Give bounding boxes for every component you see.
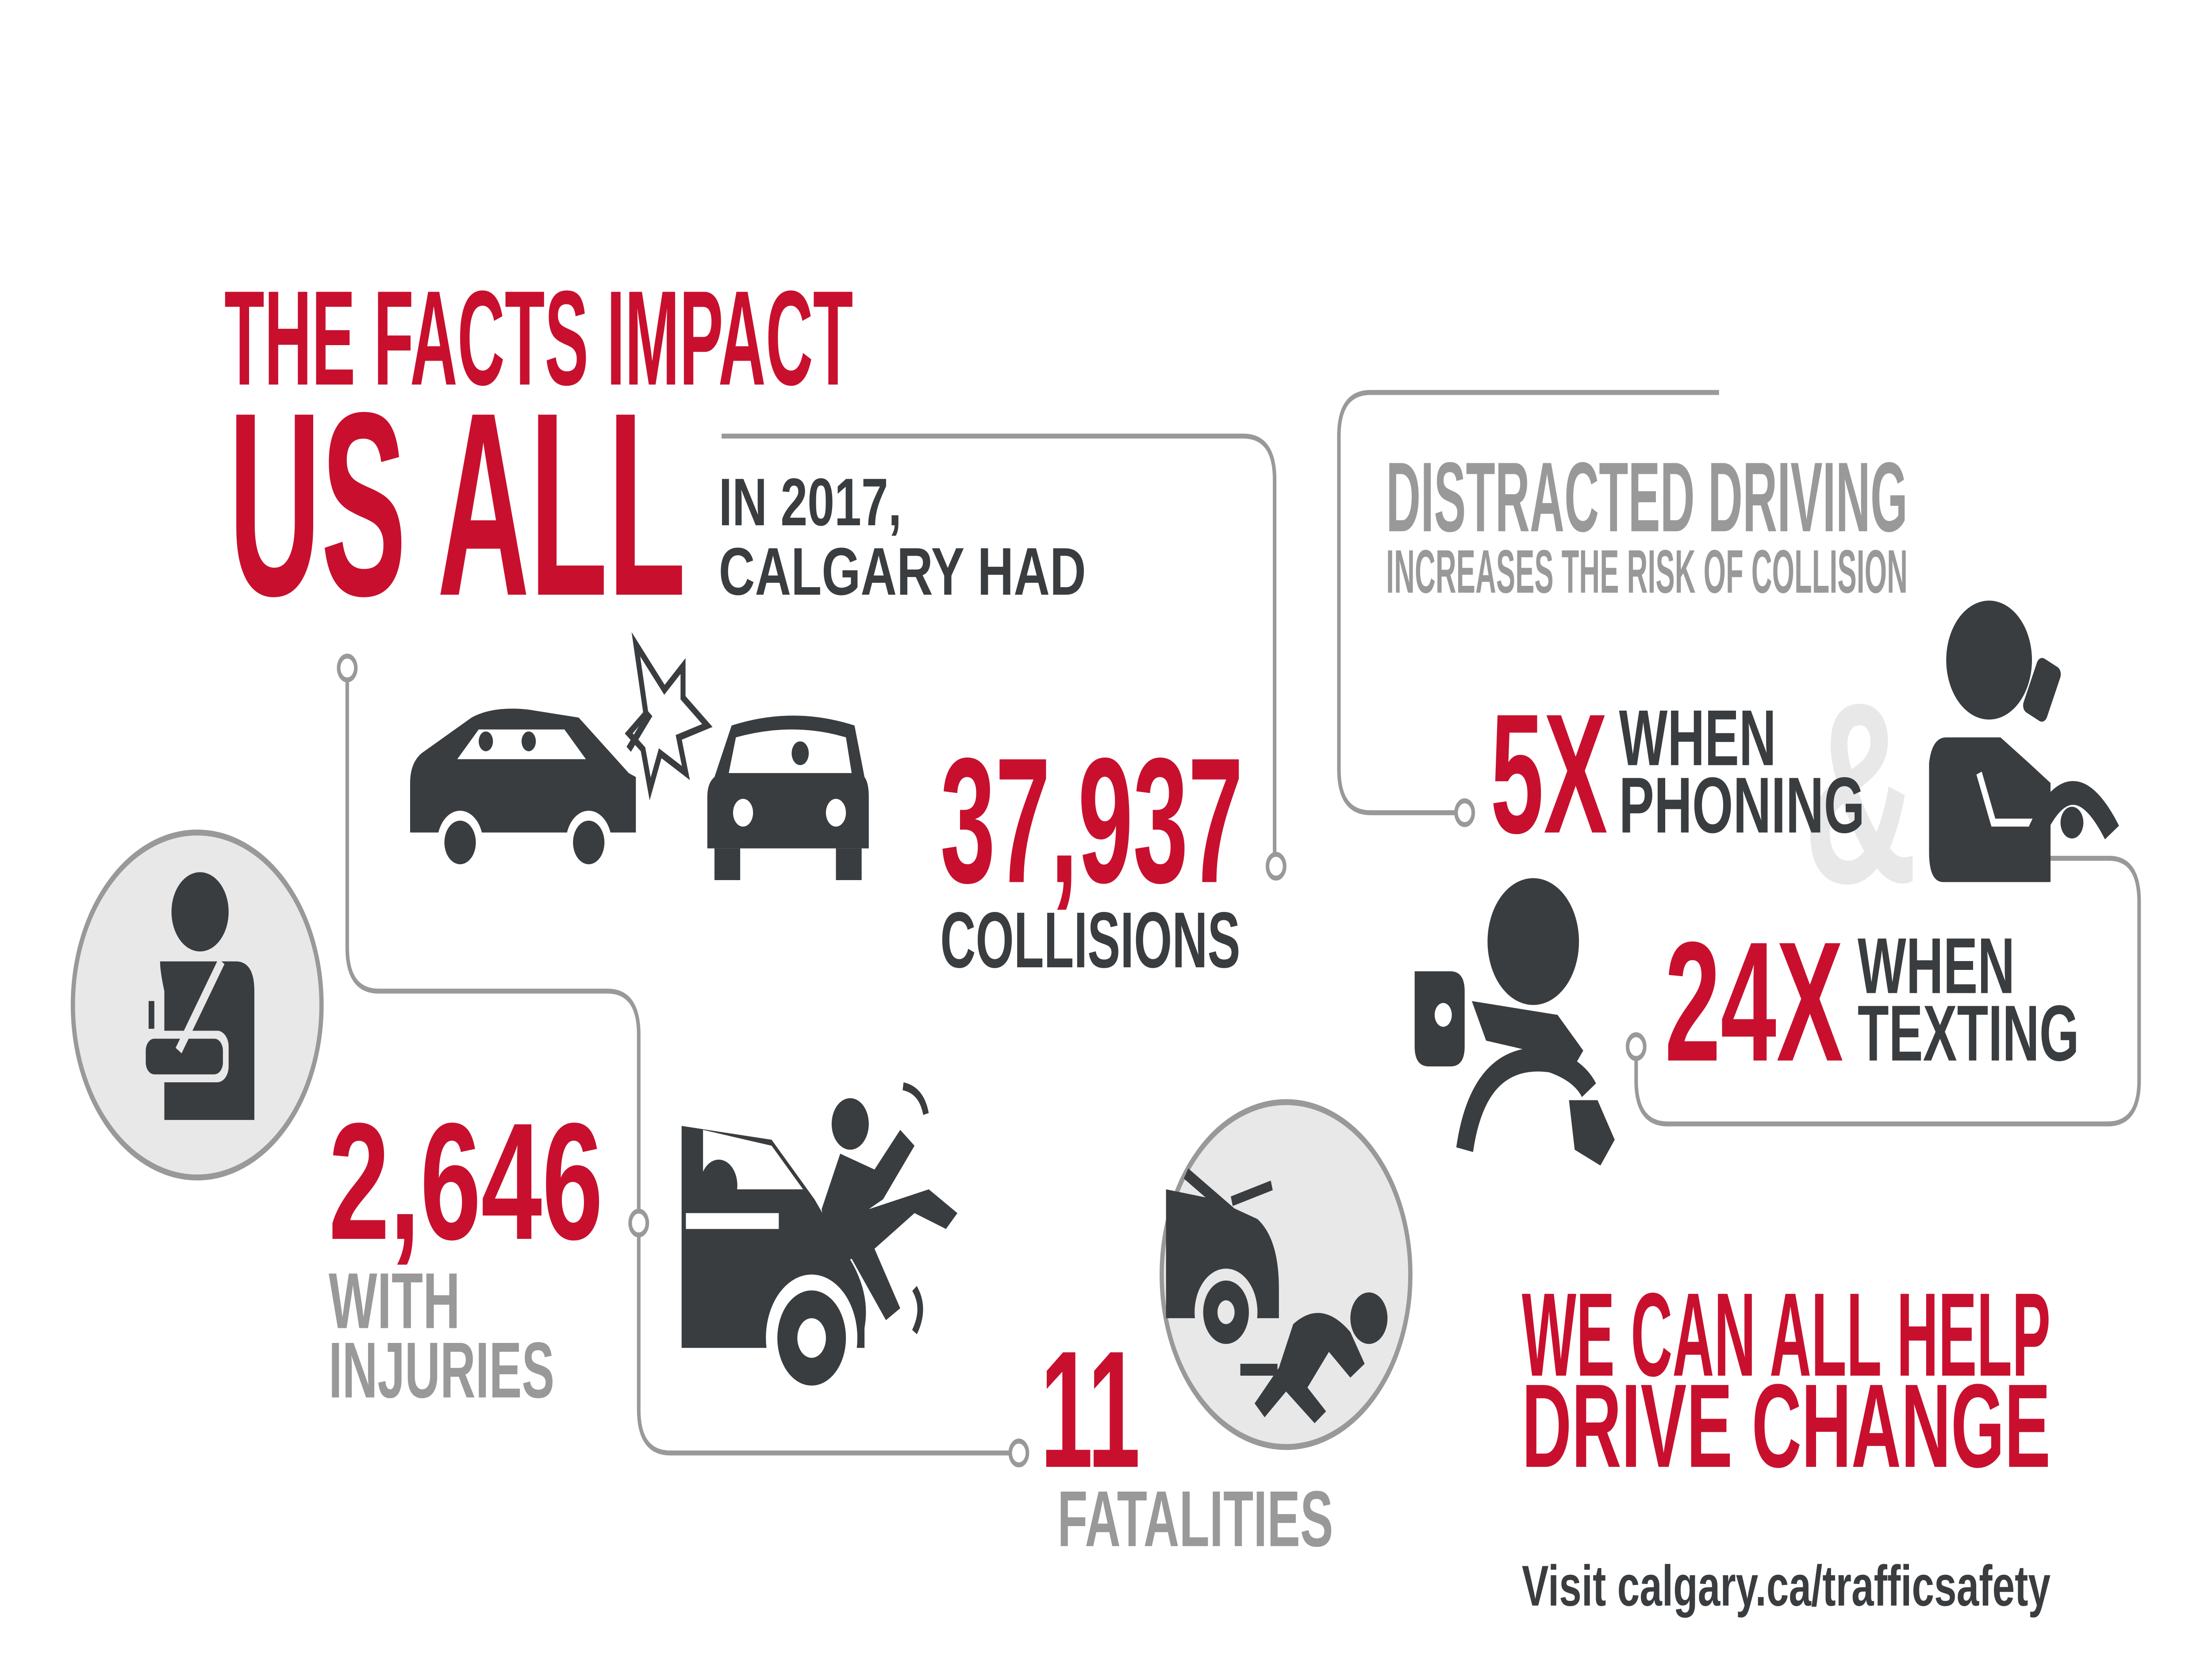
stat: phoning: PHONING [1619,762,1865,850]
stat: injuries [329,1088,603,1415]
stat: phoning [1490,679,1865,869]
stat: injuries: 2,646 [329,1088,603,1274]
call to action [1522,1268,2051,1492]
connector line: distracted driving frame [1339,392,2139,1124]
stat: phoning: WHEN [1619,694,1776,782]
stat: texting: WHEN [1858,922,2015,1010]
title: THE FACTS IMPACT [224,263,853,413]
icon: injured person circle [73,833,322,1177]
heading: distracted driving [1386,442,1908,606]
stat: fatalities: FATALITIES [1057,1475,1333,1563]
stat: fatalities: 11 [1040,1316,1141,1502]
stat: collisions: COLLISIONS [940,896,1240,985]
stat: phoning: 5X [1490,679,1608,869]
ampersand: & [1803,649,1918,937]
icon: driver texting [1415,878,1615,1165]
stat: collisions: 37,937 [940,721,1243,920]
icon: collision cars [410,644,869,880]
icon: pedestrian hit [682,1086,957,1401]
stat: collisions [940,721,1243,985]
intro text: IN 2017, [719,465,902,540]
stat: texting [1665,907,2079,1097]
stat: texting: 24X [1665,907,1844,1097]
stat: fatalities [1040,1316,1333,1563]
heading: distracted driving: DISTRACTED DRIVING [1386,442,1908,553]
connector line: collisions [722,436,1285,878]
icon: driver phoning [1929,600,2112,882]
footer link text: Visit calgary.ca/trafficsafety [1522,1554,2051,1618]
title: US ALL [229,358,686,650]
icon: fatality circle [1162,1102,1410,1447]
intro text: CALGARY HAD [719,534,1086,609]
stat: texting: TEXTING [1858,989,2079,1078]
stat: injuries: WITH [329,1257,460,1346]
heading: distracted driving: INCREASES THE RISK OF COLLISION [1386,537,1908,606]
intro text [719,465,1086,609]
stat: injuries: INJURIES [329,1327,554,1415]
connector line: injuries and fatalities [339,656,1027,1465]
call to action: DRIVE CHANGE [1522,1359,2051,1492]
